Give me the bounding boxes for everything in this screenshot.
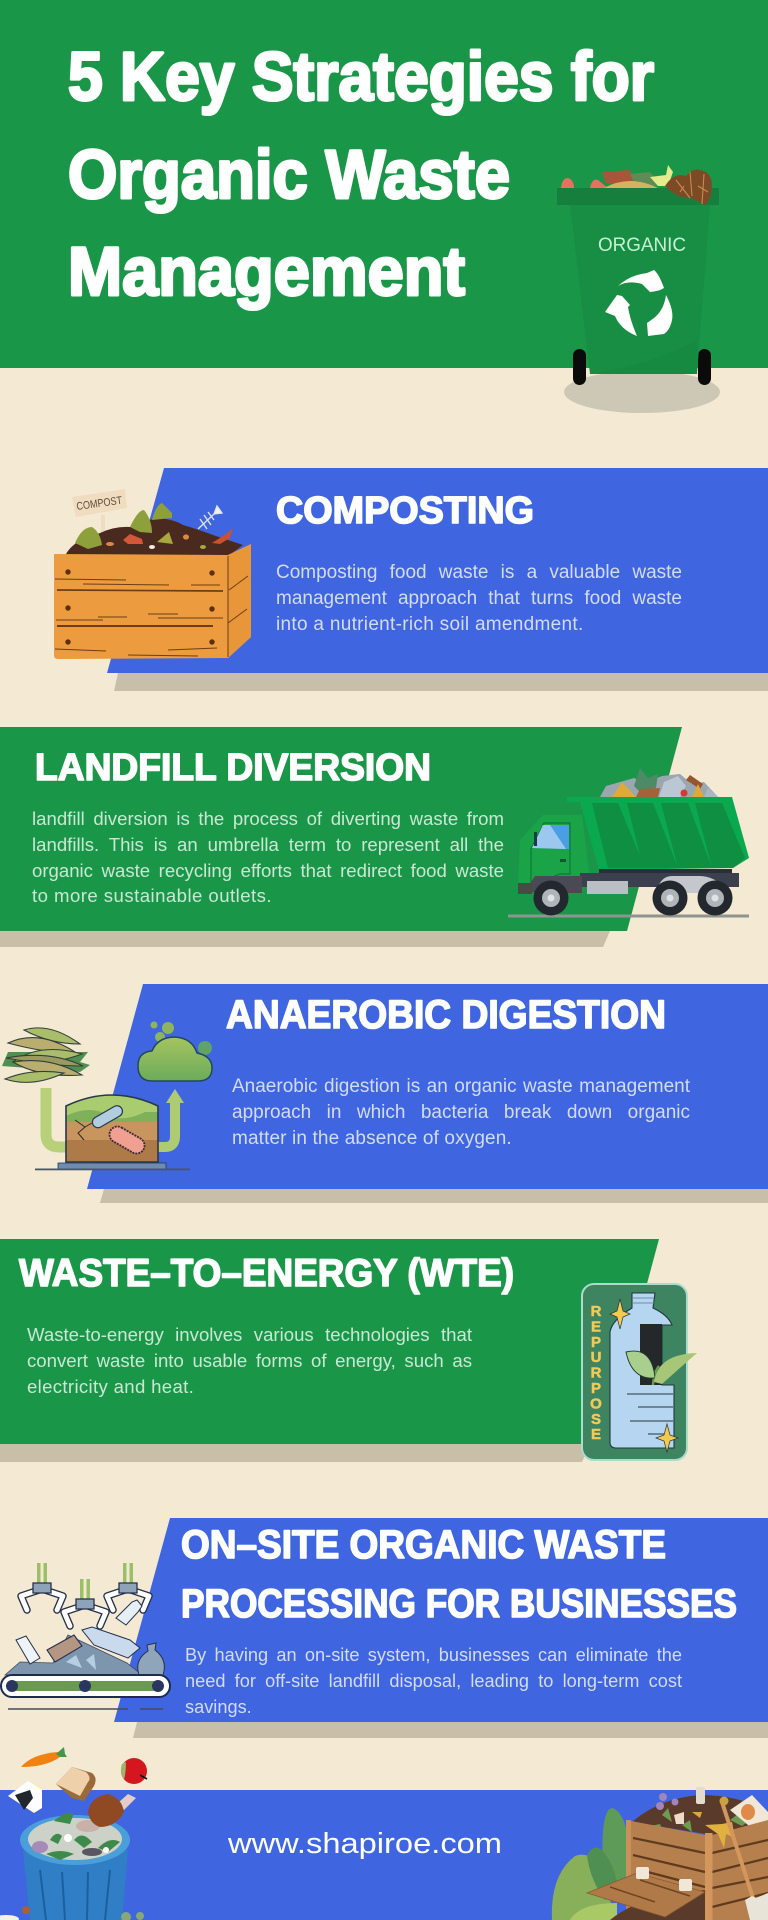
trash load: [600, 768, 718, 797]
panel shadow: [114, 673, 768, 691]
icon: garbage truck: [508, 768, 749, 918]
text block: to more sustainable outlets.: [32, 885, 272, 906]
icon: organic waste bin: [557, 165, 720, 413]
title: Management: [68, 233, 465, 310]
sign: COMPOST: [76, 495, 123, 513]
crate: [626, 1820, 768, 1920]
text block: landfills. This is an umbrella term to represent all the: [32, 834, 504, 855]
text block: [185, 1643, 682, 1723]
heading: ON–SITE ORGANIC WASTE: [181, 1523, 666, 1567]
ground line: [8, 1708, 163, 1710]
tray: [587, 1873, 705, 1917]
text block: [27, 1322, 472, 1402]
fish bone: [198, 506, 222, 529]
text block: management approach that turns food waste: [276, 588, 682, 609]
icon: food waste bin: [0, 1747, 147, 1920]
text block: organic waste recycling efforts that redirect food waste: [32, 860, 504, 881]
bin body: [23, 1850, 128, 1920]
dump body: [567, 797, 749, 870]
text block: landfill diversion is the process of diverting waste from: [32, 808, 504, 829]
vertical label: U: [591, 1349, 601, 1366]
text block: need for off-site landfill disposal, leading to long-term cost: [185, 1671, 682, 1691]
text block: approach in which bacteria break down organic: [232, 1102, 690, 1123]
panel shadow: [0, 931, 610, 947]
soil and scraps: [632, 1787, 768, 1836]
tank: [58, 1090, 166, 1169]
vertical label: P: [591, 1380, 601, 1397]
latches: [636, 1867, 692, 1891]
vertical label: E: [591, 1426, 601, 1443]
heading: COMPOSTING: [276, 490, 534, 532]
gas cloud: [138, 1022, 212, 1081]
bread: [56, 1767, 96, 1801]
cab: [518, 815, 590, 885]
text block: By having an on-site system, businesses can eliminate the: [185, 1645, 682, 1665]
panel: on-site processing: [1, 1518, 768, 1738]
header panel: [0, 0, 768, 368]
text block: Waste-to-energy involves various technologies that: [27, 1324, 472, 1345]
bottle: [610, 1293, 674, 1448]
ground line: [35, 1168, 190, 1170]
vertical label: O: [590, 1395, 602, 1412]
website url: www.shapiroe.com: [227, 1828, 502, 1860]
text block: [276, 560, 682, 640]
plant: [626, 1351, 697, 1385]
sparkles: [610, 1299, 678, 1452]
panel: waste-to-energy: [0, 1239, 697, 1462]
banana peel: [705, 1822, 735, 1848]
wheels: [534, 880, 732, 916]
panel: composting: [54, 468, 768, 691]
left pipe: [46, 1088, 67, 1147]
onigiri: [8, 1781, 42, 1813]
bin wheels: [573, 349, 711, 385]
vertical label: S: [591, 1411, 601, 1428]
robot claws: [21, 1563, 149, 1626]
apple: [121, 1758, 147, 1784]
vertical label: R: [591, 1365, 602, 1382]
conveyor belt: [1, 1675, 170, 1697]
carrot: [21, 1747, 67, 1767]
heading: WASTE–TO–ENERGY (WTE): [19, 1252, 514, 1295]
shovel: [720, 1796, 768, 1920]
text block: savings.: [185, 1697, 252, 1717]
icon: repurpose bottle badge: [582, 1284, 697, 1460]
text block: [232, 1074, 690, 1154]
ground line: [508, 914, 749, 918]
icon: compost crate: [54, 489, 251, 659]
text block: Composting food waste is a valuable waste: [276, 562, 682, 583]
bin contents: [561, 165, 673, 188]
vertical label: R: [591, 1303, 602, 1320]
heading: LANDFILL DIVERSION: [35, 747, 431, 789]
title: [68, 38, 654, 310]
heap under tray: [610, 1890, 705, 1920]
brown leaf: [665, 170, 712, 205]
text block: into a nutrient-rich soil amendment.: [276, 614, 584, 635]
chassis: [599, 869, 732, 874]
heading: [181, 1523, 737, 1626]
title: Organic Waste: [68, 136, 510, 213]
heading: ANAEROBIC DIGESTION: [226, 993, 666, 1037]
foliage: [552, 1808, 630, 1920]
meat: [88, 1794, 136, 1827]
icon: compost box: [552, 1787, 768, 1920]
vertical label: P: [591, 1334, 601, 1351]
footer panel: [0, 1747, 768, 1920]
icon: waste conveyor: [1, 1563, 170, 1709]
vertical label: E: [591, 1318, 601, 1335]
leaves: [2, 1028, 90, 1082]
panel shadow: [0, 1444, 590, 1462]
waste pile: [5, 1600, 164, 1675]
text block: [32, 806, 504, 912]
title: 5 Key Strategies for: [68, 38, 654, 115]
panel: landfill diversion: [0, 727, 749, 947]
scraps: [0, 1906, 144, 1920]
right pipe with arrow: [157, 1089, 184, 1147]
bin label: ORGANIC: [598, 235, 686, 256]
text block: Anaerobic digestion is an organic waste management: [232, 1076, 690, 1097]
held bottle: [116, 1600, 142, 1625]
panel shadow: [133, 1722, 768, 1738]
text block: matter in the absence of oxygen.: [232, 1128, 512, 1149]
sign: [72, 489, 127, 533]
panel shadow: [100, 1189, 768, 1203]
icon: anaerobic digester: [2, 1022, 212, 1170]
leaves and scraps: [75, 503, 233, 549]
icon: recycling arrows: [605, 270, 672, 336]
bin contents: [32, 1813, 120, 1860]
text block: convert waste into usable forms of energy, such as: [27, 1350, 472, 1371]
panel: anaerobic digestion: [2, 984, 768, 1203]
text block: electricity and heat.: [27, 1376, 194, 1397]
